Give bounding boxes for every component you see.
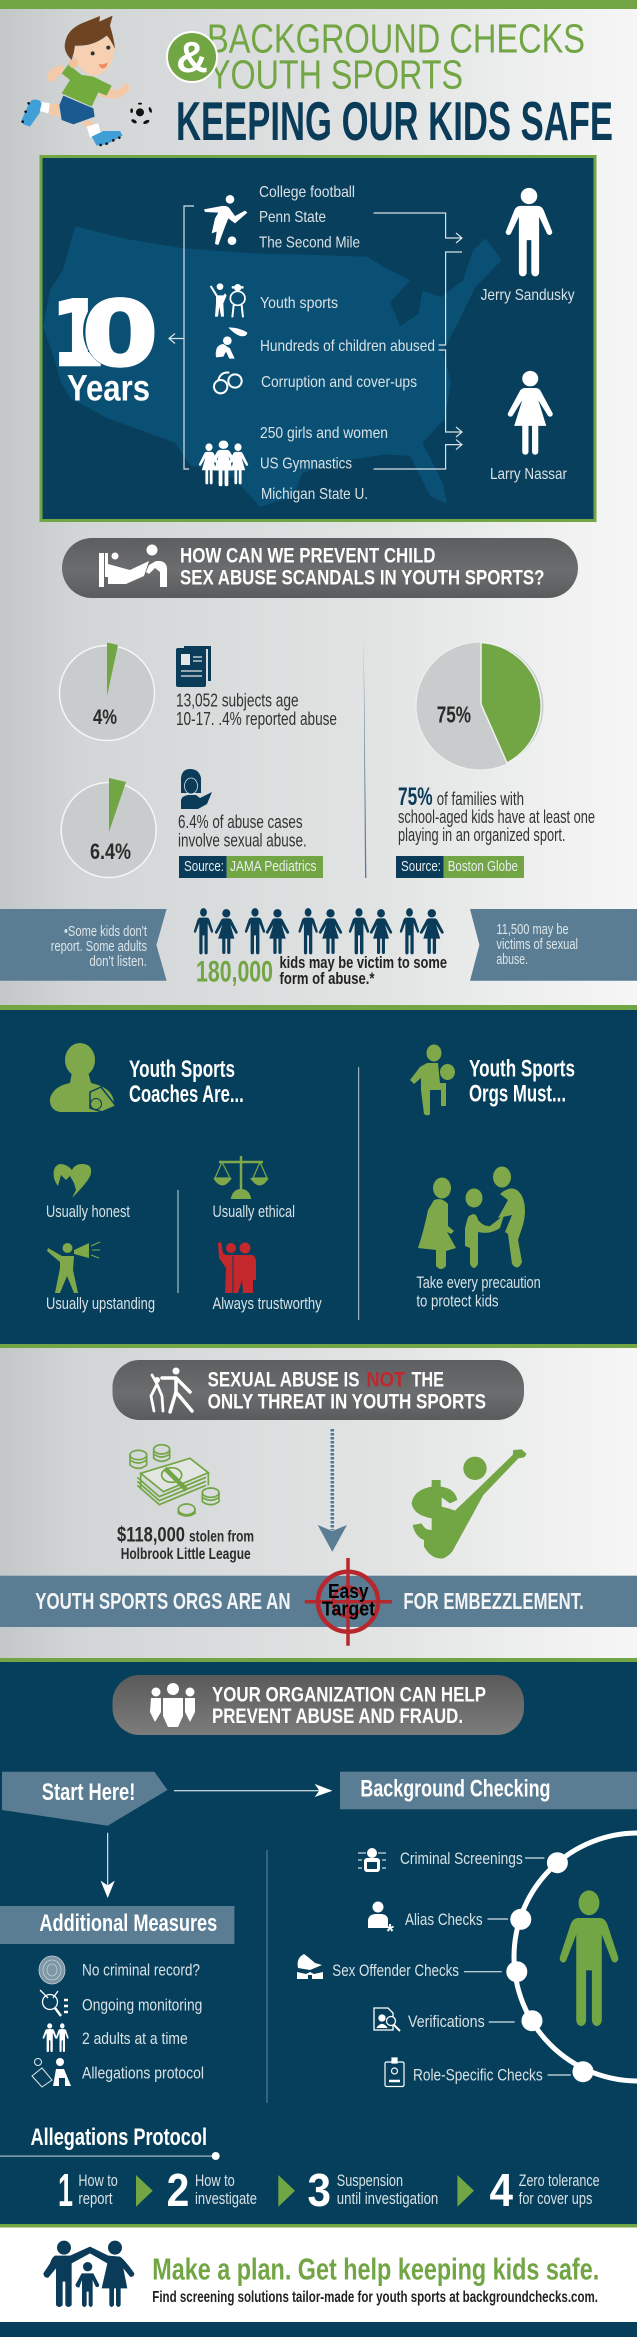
- start here pentagon: Start Here!: [42, 1779, 135, 1806]
- icon: male figure: [506, 188, 552, 276]
- ribbon: 11,500 victims: victims of sexual: [496, 936, 578, 953]
- big number: 10 years: 1: [51, 281, 105, 386]
- text: 75% of families: 75%: [398, 783, 433, 811]
- pie chart: 4%: [60, 642, 154, 740]
- text: hundreds of children abused: Hundreds of children abused: [260, 338, 435, 355]
- text: $118,000 stolen: [117, 1524, 254, 1563]
- ribbon: easy target: YOUTH SPORTS ORGS ARE AN: [35, 1588, 290, 1614]
- connector arrows to perpetrators: [374, 213, 462, 469]
- heading: allegations protocol: Allegations Protocol: [30, 2124, 207, 2151]
- ribbon: easy target: [0, 1558, 637, 1646]
- text: corruption and cover-ups: Corruption and cover-ups: [261, 374, 417, 391]
- text: youth sports: Youth sports: [260, 295, 338, 312]
- map of the United States: [43, 226, 502, 507]
- text: larry nassar facts: US Gymnastics: [260, 456, 352, 473]
- label: 2 adults at a time: 2 adults at a time: [82, 2029, 188, 2048]
- icon: scales of justice: [215, 1156, 267, 1198]
- icon: stacks of cash and coins: [130, 1445, 219, 1516]
- icon: person with megaphone: [47, 1242, 100, 1293]
- item: verifications: [374, 2008, 485, 2031]
- heading: sexual abuse is not the only threat: SEXUAL ABUSE IS: [208, 1369, 360, 1392]
- item: criminal screenings: Criminal Screenings: [400, 1849, 523, 1868]
- icon: child kicking ball: [410, 1044, 455, 1116]
- ribbon: some kids don't report: report. Some adults: [51, 938, 147, 955]
- heading: sexual abuse is not the only threat: THE: [412, 1369, 444, 1392]
- step 2: [167, 2164, 257, 2216]
- footer band: call to action: [0, 2224, 637, 2322]
- step 4: [490, 2164, 600, 2216]
- item: role-specific checks: Role-Specific Checks: [413, 2066, 543, 2085]
- step 3: 3: [308, 2164, 331, 2216]
- ribbon: 11,500 victims: [470, 909, 637, 981]
- ribbon: 11,500 victims: 11,500 may be: [496, 921, 569, 938]
- icon: coach with whistle: [50, 1043, 116, 1112]
- heading: how can we prevent: HOW CAN WE PREVENT CHILD: [180, 545, 436, 568]
- step 2: investigate: [195, 2189, 257, 2208]
- pie chart: 75%: 75%: [437, 702, 471, 728]
- text: penn state facts: The Second Mile: [259, 235, 360, 252]
- text: 75% of families: of families with: [437, 789, 524, 809]
- chevron 3: [457, 2175, 474, 2207]
- title line: youth sports: YOUTH SPORTS: [209, 52, 463, 98]
- text: 6.4% of abuse cases: [178, 812, 307, 851]
- heading: how can we prevent: [62, 538, 578, 598]
- icon: handcuffs: [214, 373, 242, 393]
- background checking header: [340, 1772, 637, 1809]
- bracket and arrow to ten years: [169, 206, 194, 469]
- big number: 10 years: Years: [67, 368, 150, 408]
- arrow: to background checking: [174, 1785, 331, 1796]
- item: role-specific checks: [385, 2058, 543, 2086]
- text: 6.4% of abuse cases: 6.4% of abuse cases: [178, 812, 303, 832]
- additional measures header: Additional Measures: [39, 1910, 217, 1937]
- text: larry nassar facts: Michigan State U.: [261, 486, 368, 503]
- step 2: How to: [195, 2171, 235, 2190]
- item: alias checks: [368, 1902, 483, 1943]
- text: penn state facts: College football: [259, 184, 355, 201]
- text: 75% of families: playing in an organized sport.: [398, 825, 566, 845]
- step 4: for cover ups: [519, 2189, 592, 2208]
- text: larry nassar facts: [260, 425, 388, 503]
- vertical divider: [364, 635, 366, 878]
- text: 6.4% of abuse cases: involve sexual abuse.: [178, 831, 307, 851]
- label: usually honest: Usually honest: [46, 1202, 130, 1221]
- panel: coaches and organizations: [0, 1005, 637, 1348]
- step 4: 4: [490, 2164, 513, 2216]
- heading: sexual abuse is not the only threat: NOT: [366, 1369, 405, 1392]
- text: larry nassar facts: 250 girls and women: [260, 425, 388, 442]
- ribbon: some kids don't report: [0, 909, 167, 981]
- step 3: until investigation: [337, 2189, 438, 2208]
- arrow: dotted down arrow: [318, 1429, 347, 1552]
- item: alias checks: *: [386, 1921, 394, 1943]
- ampersand badge: [167, 32, 217, 82]
- statistic: 180,000 kids: [196, 953, 447, 989]
- heading: youth sports coaches are: Coaches Are...: [129, 1081, 244, 1108]
- icon: family under roof: [43, 2241, 134, 2307]
- text: 75% of families: [398, 783, 595, 845]
- icon: bed and adult figure: [99, 544, 167, 587]
- step 1: How to: [78, 2171, 118, 2190]
- heading: sexual abuse is not the only threat: [112, 1360, 524, 1420]
- step 2: 2: [167, 2164, 189, 2216]
- icon: female figure: [508, 371, 553, 455]
- diagram: ring of checks around figure: [297, 1833, 637, 2086]
- item: sex offender checks: Sex Offender Checks: [332, 1961, 459, 1980]
- icon: group of people: [150, 1683, 195, 1727]
- pie chart: 6.4%: [61, 778, 156, 878]
- item: alias checks: Alias Checks: [405, 1910, 483, 1929]
- item: criminal screenings: [358, 1848, 523, 1872]
- text: take every precaution: to protect kids: [416, 1292, 498, 1311]
- step 4: Zero tolerance: [519, 2171, 600, 2190]
- icon row: ten children: [194, 908, 444, 954]
- step 1: report: [78, 2189, 113, 2208]
- arrow: to additional measures: [102, 1833, 114, 1897]
- source tag: boston globe: [396, 856, 524, 878]
- icon: monitoring magnifier: [40, 1990, 68, 2016]
- pie chart: 6.4%: 6.4%: [90, 839, 131, 864]
- source tag: jama pediatrics: JAMA Pediatrics: [230, 858, 316, 875]
- text: penn state facts: [259, 184, 360, 252]
- text: penn state facts: Penn State: [259, 209, 326, 226]
- step 1: 1: [58, 2164, 73, 2216]
- ribbon: some kids don't report: •Some kids don't: [64, 923, 148, 940]
- start here pentagon: [2, 1772, 167, 1826]
- connector lines: [464, 1858, 571, 2075]
- icon: woman with hand: [181, 769, 212, 809]
- icon: dollar sign check with bat: [412, 1449, 527, 1559]
- icon: crosshair target: Target: [322, 1599, 375, 1621]
- label: ongoing monitoring: Ongoing monitoring: [82, 1996, 202, 2015]
- text: $118,000 stolen: Holbrook Little League: [121, 1546, 251, 1563]
- panel: your organization can help: [0, 1658, 637, 2227]
- statistic: 180,000 kids: kids may be victim to some: [280, 953, 447, 972]
- icon: family holding hands: [418, 1166, 525, 1269]
- illustration: boy running with soccer ball: [21, 16, 153, 146]
- source tag: jama pediatrics: [179, 856, 323, 878]
- icon: document: [176, 646, 211, 687]
- icon: abused child: [216, 327, 247, 359]
- big number: 10 years: 0: [82, 282, 158, 387]
- pie chart: 4%: 4%: [93, 706, 117, 729]
- source tag: jama pediatrics: Source:: [184, 858, 224, 875]
- heading: sexual abuse is not the only threat: ONLY THREAT IN YOUTH SPORTS: [208, 1390, 486, 1413]
- label: usually ethical: Usually ethical: [212, 1202, 295, 1221]
- icon: crosshair target: Easy: [328, 1581, 369, 1603]
- item: verifications: Verifications: [408, 2012, 485, 2031]
- text: 13,052 subjects: 10-17. .4% reported abuse: [176, 709, 337, 729]
- label: always trustworthy: Always trustworthy: [212, 1294, 322, 1313]
- source tag: boston globe: Source:: [401, 858, 441, 875]
- bottom navy bar: [0, 2322, 637, 2337]
- big number: 10 years: [51, 281, 158, 408]
- icon: green figure: [560, 1890, 618, 2026]
- item: sex offender checks: [297, 1954, 459, 1980]
- heading: youth sports orgs must: [469, 1056, 575, 1108]
- heading: youth sports orgs must: Youth Sports: [469, 1056, 575, 1083]
- step 1: [58, 2164, 118, 2216]
- long divider: [358, 1067, 359, 1320]
- label: jerry sandusky: Jerry Sandusky: [481, 287, 575, 304]
- label: usually upstanding: Usually upstanding: [46, 1294, 155, 1313]
- panel: ten years timeline: [41, 156, 595, 520]
- heading: your organization: PREVENT ABUSE AND FRAUD.: [212, 1705, 463, 1728]
- icon: three girls: [199, 440, 248, 486]
- text: take every precaution: Take every precaution: [416, 1273, 541, 1292]
- icon: soccer player: [204, 195, 247, 245]
- ribbon: some kids don't report: don't listen.: [89, 953, 147, 970]
- statistic: 180,000 kids: 180,000: [196, 956, 273, 989]
- label: larry nassar: Larry Nassar: [490, 466, 568, 483]
- title: [167, 16, 613, 152]
- source tag: boston globe: Boston Globe: [448, 858, 518, 875]
- text: 13,052 subjects: 13,052 subjects age: [176, 691, 299, 711]
- heading: youth sports orgs must: Orgs Must...: [469, 1081, 566, 1108]
- ring nodes: [506, 1852, 594, 2082]
- icon: two adults: [43, 2023, 69, 2052]
- icon: two figures: [151, 1368, 192, 1412]
- icon: crosshair target: [305, 1558, 392, 1646]
- icon: allegations: [32, 2058, 71, 2087]
- chevron 1: [136, 2175, 153, 2207]
- label: no criminal record: No criminal record?: [82, 1961, 200, 1980]
- text: $118,000 stolen: $118,000: [117, 1524, 185, 1547]
- statistic: 180,000 kids: form of abuse.*: [280, 969, 375, 988]
- icon: heart with hand: [54, 1164, 91, 1198]
- pie chart: 75%: [416, 642, 544, 770]
- icon: two suspicious figures in red: [218, 1242, 256, 1293]
- allegations protocol steps: [0, 2124, 600, 2216]
- text: take every precaution: [416, 1273, 541, 1311]
- ribbon: 11,500 victims: abuse.: [496, 951, 528, 968]
- ampersand badge: &: [176, 33, 208, 82]
- icon: fingerprint: [39, 1956, 65, 1984]
- additional measures header: [0, 1906, 234, 1944]
- heading: youth sports coaches are: [129, 1056, 244, 1108]
- chevron 2: [278, 2175, 295, 2207]
- background checking header: Background Checking: [360, 1776, 550, 1803]
- heading: your organization: [112, 1675, 524, 1735]
- step 3: Suspension: [337, 2171, 403, 2190]
- heading: how can we prevent: SEX ABUSE SCANDALS IN YOUTH SPORTS?: [180, 566, 544, 589]
- text: $118,000 stolen: stolen from: [189, 1529, 254, 1546]
- icon: youth athletes: [211, 283, 245, 317]
- step 3: [308, 2164, 438, 2216]
- label: allegations protocol: Allegations protocol: [82, 2063, 204, 2082]
- inner divider: [178, 1190, 179, 1293]
- top green bar: [0, 0, 637, 9]
- section divider: [266, 1850, 268, 2103]
- heading: your organization: YOUR ORGANIZATION CAN HELP: [212, 1684, 486, 1707]
- heading: youth sports coaches are: Youth Sports: [129, 1056, 235, 1083]
- heading underline with dot: [0, 2152, 220, 2160]
- text: 13,052 subjects: [176, 691, 337, 729]
